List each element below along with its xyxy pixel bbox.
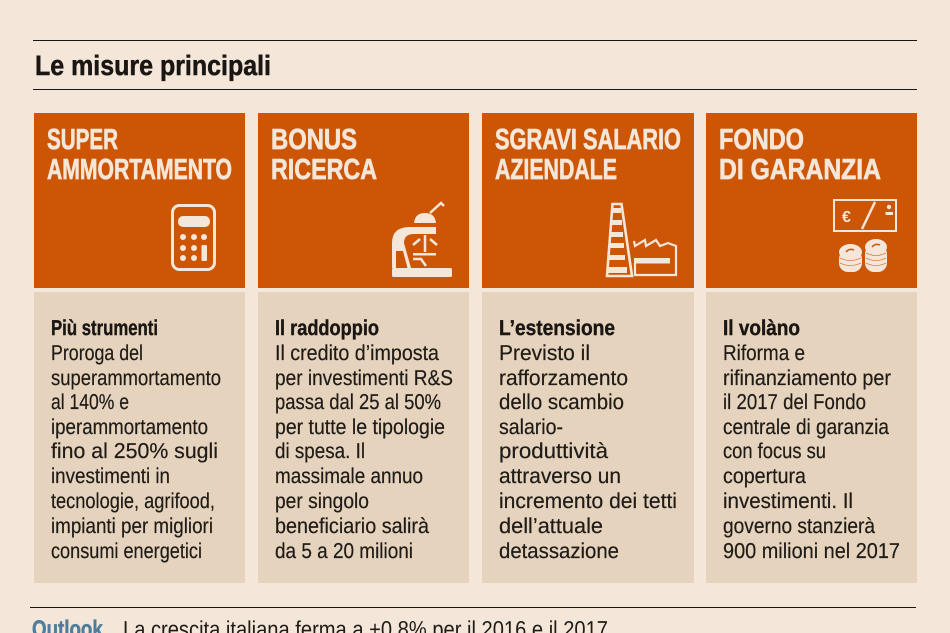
body text: il raddoppio: da 5 a 20 milioni [275,539,413,563]
heading: super ammortamento [47,124,232,186]
body text: l'estensione: produttività [499,439,608,463]
body panel: super ammortamento [34,292,245,583]
body text: l'estensione: detassazione [499,539,619,563]
body text: l'estensione: rafforzamento [499,366,628,390]
body text: il raddoppio: passa dal 25 al 50% [275,390,441,414]
heading: bonus ricerca: RICERCA [271,154,377,186]
body text: l'estensione: attraverso un [499,464,621,488]
heading: super ammortamento: AMMORTAMENTO [47,154,232,186]
icon: factory [607,204,676,276]
body text: il raddoppio: Il raddoppio [275,316,379,340]
body text: il volàno: Il volàno [723,316,800,340]
body text: l'estensione: L’estensione [499,316,615,340]
body panel: sgravi salario aziendale [482,292,694,583]
panel: fondo di garanzia [706,113,917,583]
body text: l'estensione: Previsto il [499,341,590,365]
body text: il volàno: centrale di garanzia [723,415,889,439]
panel: sgravi salario aziendale [482,113,694,583]
body text: più strumenti: al 140% e [51,390,129,414]
body text: più strumenti: iperammortamento [51,415,208,439]
body text: più strumenti: Più strumenti [51,316,158,340]
body text: più strumenti: consumi energetici [51,539,202,563]
body text: più strumenti: investimenti in [51,464,170,488]
icon: microscope [392,203,452,277]
heading: super ammortamento: SUPER [47,124,118,156]
body text: il volàno: con focus su [723,439,826,463]
body text: più strumenti: tecnologie, agrifood, [51,489,215,513]
body text: l'estensione: incremento dei tetti [499,489,677,513]
title: Le misure principali [35,50,271,81]
panel: super ammortamento [34,113,245,583]
body text: il raddoppio: di spesa. Il [275,439,365,463]
body text: più strumenti [51,316,221,563]
body text: il volàno: governo stanzierà [723,514,875,538]
body text: l'estensione: dell’attuale [499,514,603,538]
body text: il volàno: rifinanziamento per [723,366,891,390]
body text: il volàno: Riforma e [723,341,805,365]
body panel: bonus ricerca [258,292,469,583]
header card: sgravi salario aziendale [482,113,694,288]
body text: il volàno: investimenti. Il [723,489,853,513]
body text: l'estensione: dello scambio [499,390,624,414]
body text: più strumenti: superammortamento [51,366,221,390]
heading: bonus ricerca: BONUS [271,124,357,156]
body text: più strumenti: Proroga del [51,341,143,365]
body text: più strumenti: impianti per migliori [51,514,213,538]
heading: fondo di garanzia: FONDO [719,124,804,156]
body text: il volàno: 900 milioni nel 2017 [723,539,900,563]
body panel: fondo di garanzia [706,292,917,583]
header card: super ammortamento [34,113,245,288]
panel: bonus ricerca [258,113,469,583]
header card: bonus ricerca [258,113,469,288]
icon: calculator [172,206,214,270]
heading: sgravi salario aziendale [495,124,681,186]
body text: il raddoppio [275,316,453,563]
body text: il volàno: copertura [723,464,806,488]
icon: banknote and coins [834,200,896,272]
body text: il raddoppio: per investimenti R&S [275,366,453,390]
body text: il raddoppio: massimale annuo [275,464,423,488]
body text: il raddoppio: Il credito d’imposta [275,341,439,365]
body text: il raddoppio: per tutte le tipologie [275,415,445,439]
body text: più strumenti: fino al 250% sugli [51,439,218,463]
body text: il volàno [723,316,900,563]
body text: l'estensione [499,316,677,563]
heading: bonus ricerca [271,124,377,186]
icon: banknote and coins: € [842,209,851,226]
body text: l'estensione: salario- [499,415,563,439]
heading: sgravi salario aziendale: SGRAVI SALARIO [495,124,681,156]
body text: il raddoppio: per singolo [275,489,369,513]
heading: fondo di garanzia [719,124,881,186]
header card: fondo di garanzia [706,113,917,288]
body text: il volàno: il 2017 del Fondo [723,390,866,414]
heading: sgravi salario aziendale: AZIENDALE [495,154,617,186]
heading: fondo di garanzia: DI GARANZIA [719,154,881,186]
body text: il raddoppio: beneficiario salirà [275,514,429,538]
